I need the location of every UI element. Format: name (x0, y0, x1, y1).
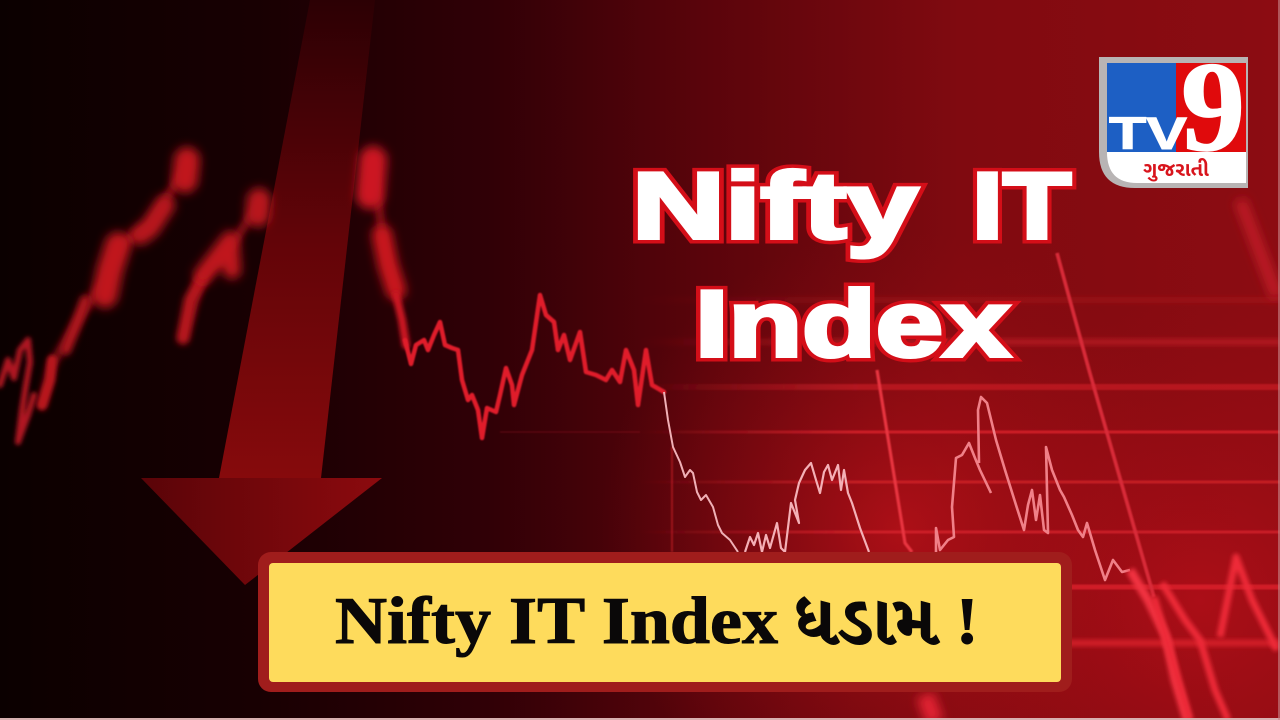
banner headline (335, 583, 978, 660)
title fill: Nifty (632, 153, 918, 258)
banner headline: Nifty IT Index (335, 584, 779, 658)
logo numeral: 9 (1181, 36, 1245, 178)
chart line: right, fading to white (664, 200, 1277, 720)
banner headline: ધડામ (793, 583, 940, 660)
title fill: IT (972, 153, 1071, 258)
title fill: Index (695, 271, 1010, 376)
logo white strip (1107, 152, 1246, 183)
arrow: downward trend (141, 0, 382, 585)
logo: TV9 Gujarati (1099, 36, 1248, 188)
title outline: Index (695, 271, 1010, 376)
title outline: Nifty (632, 153, 918, 258)
banner headline: ! (956, 584, 978, 658)
faint axis lines (500, 432, 672, 552)
logo language label: ગુજરાતી (1143, 158, 1209, 185)
logo letters: TV (1109, 108, 1187, 159)
logo red panel (1176, 63, 1246, 152)
blurred chart line: left (0, 160, 664, 442)
banner (258, 552, 1072, 692)
title: Nifty IT Index (632, 153, 1071, 376)
title outline (632, 153, 1071, 376)
logo blue panel (1107, 63, 1176, 152)
grid lines (640, 300, 1280, 643)
title outline: IT (972, 153, 1071, 258)
title fill (632, 153, 1071, 376)
banner yellow panel (269, 563, 1061, 682)
